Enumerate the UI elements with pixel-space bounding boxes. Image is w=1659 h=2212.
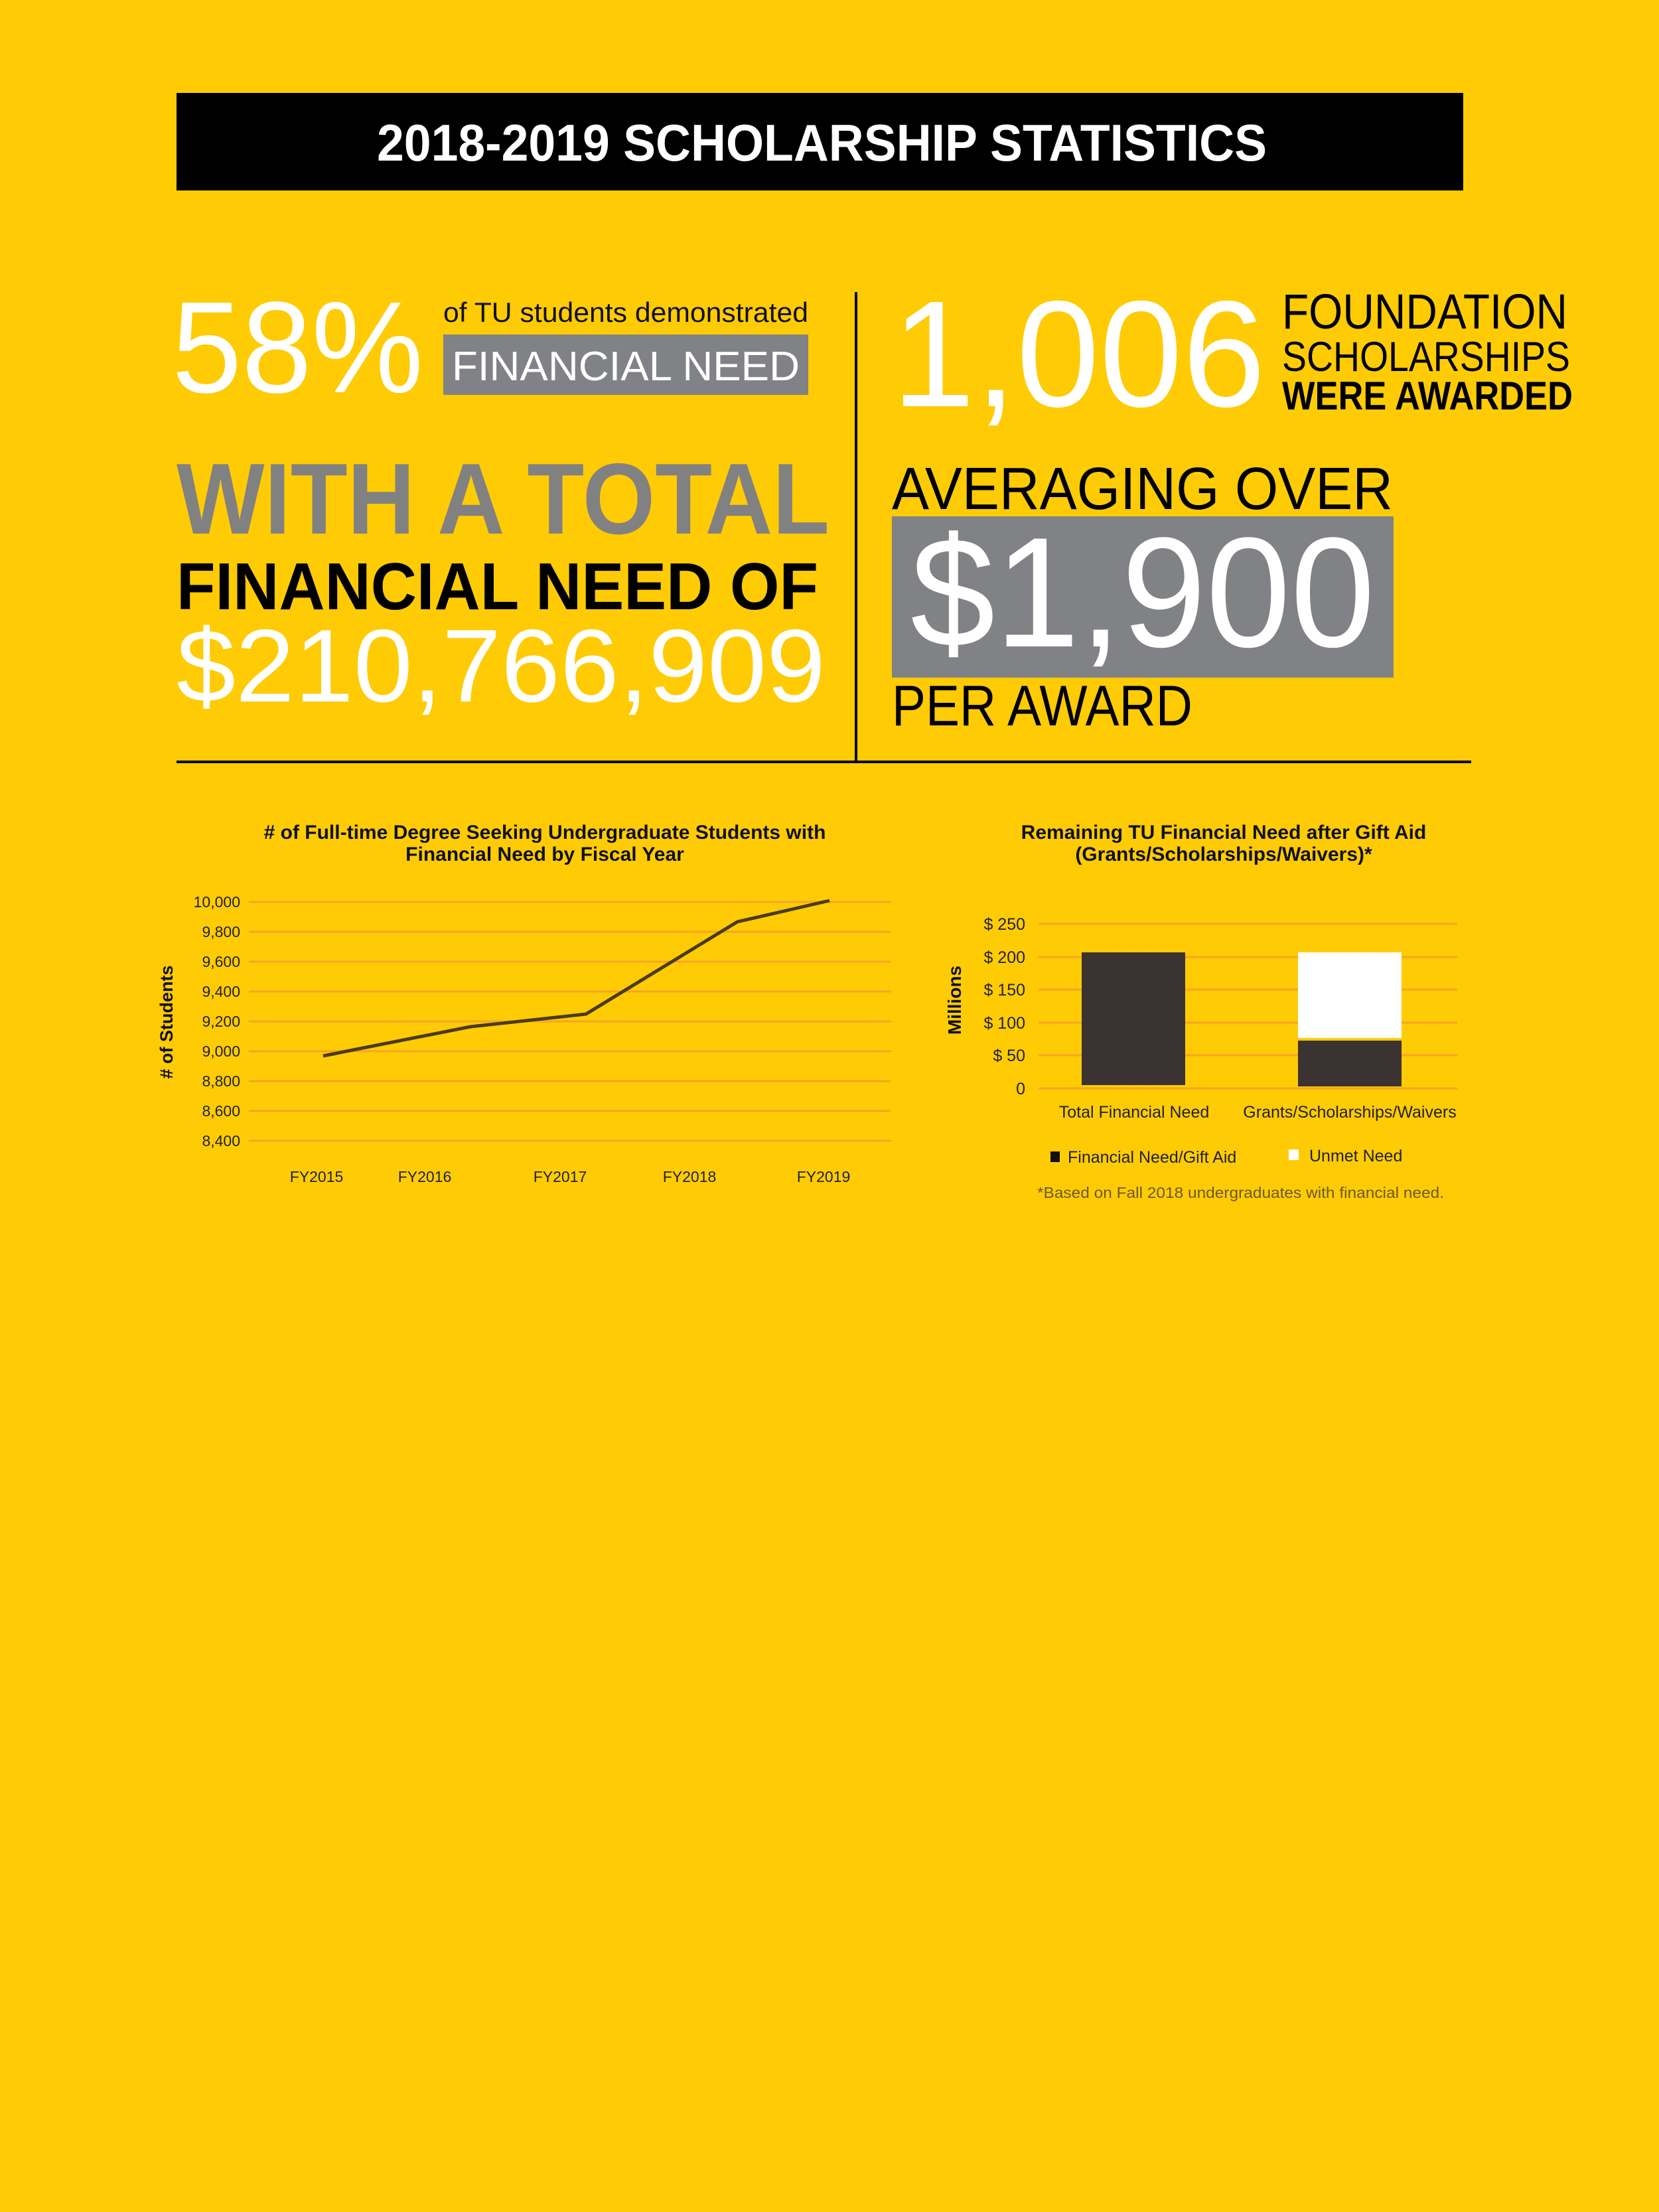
bar chart: remaining need: $ 100	[983, 1014, 1025, 1033]
stat: 58% financial need: 58%	[172, 275, 423, 420]
stat: average award	[892, 456, 1394, 738]
line chart: students with financial need	[157, 822, 891, 1185]
bar chart: remaining need: Financial Need/Gift Aid	[1068, 1148, 1236, 1167]
bar chart: remaining need: (Grants/Scholarships/Waivers)*	[1075, 844, 1372, 865]
bar chart: remaining need: Grants/Scholarships/Waivers	[1243, 1103, 1457, 1122]
stat: 1,006 scholarships: SCHOLARSHIPS	[1282, 334, 1570, 380]
stat: average award: PER AWARD	[892, 674, 1192, 738]
bar chart: remaining need: Unmet Need	[1309, 1147, 1402, 1165]
line chart: students with financial need: FY2018	[663, 1168, 716, 1185]
stat: average award: AVERAGING OVER	[892, 456, 1393, 522]
bar chart: remaining need: $ 50	[993, 1047, 1025, 1065]
stat: 1,006 scholarships: FOUNDATION	[1282, 284, 1567, 339]
stat: 58% financial need: of TU students demonstrated	[443, 297, 808, 328]
line chart: students with financial need: 9,000	[202, 1043, 240, 1060]
bar chart: remaining need: Remaining TU Financial Need after Gift Aid	[1021, 822, 1426, 844]
bar chart: remaining need: $ 150	[983, 981, 1025, 999]
stat: average award: $1,900	[910, 505, 1375, 680]
stat: 58% financial need: FINANCIAL NEED	[452, 344, 800, 390]
stat: total financial need: $210,766,909	[177, 609, 826, 724]
stat: total financial need: FINANCIAL NEED OF	[177, 550, 818, 624]
bar chart: remaining need: Millions	[944, 966, 965, 1035]
line chart: students with financial need: 8,600	[202, 1102, 240, 1120]
line chart: students with financial need: 9,200	[202, 1013, 240, 1030]
line chart: students with financial need: 9,600	[202, 953, 240, 970]
line chart: students with financial need: 9,400	[202, 983, 240, 1000]
bar chart: remaining need: $ 250	[983, 915, 1025, 934]
title bar	[177, 93, 1463, 190]
stat: 1,006 scholarships: WERE AWARDED	[1282, 374, 1573, 418]
line chart: students with financial need: # of Full-time Degree Seeking Undergraduate Students with	[264, 822, 826, 844]
line chart: students with financial need: Financial Need by Fiscal Year	[405, 844, 684, 865]
bar chart: remaining need: *Based on Fall 2018 undergraduates with financial need.	[1037, 1184, 1444, 1201]
line chart: students with financial need: FY2019	[797, 1168, 850, 1185]
line chart: students with financial need: 8,800	[202, 1072, 240, 1090]
bar chart: remaining need: 0	[1016, 1080, 1025, 1098]
bar chart: remaining need	[944, 822, 1457, 1201]
stat: 58% financial need	[172, 275, 808, 420]
stat: 1,006 scholarships: 1,006	[892, 270, 1265, 439]
bar chart: remaining need: Total Financial Need	[1059, 1103, 1209, 1122]
line chart: students with financial need: 8,400	[202, 1132, 240, 1149]
line chart: students with financial need: 9,800	[202, 923, 240, 940]
stat: total financial need: WITH A TOTAL	[177, 443, 830, 555]
bar chart: remaining need: $ 200	[983, 948, 1025, 967]
line chart: students with financial need: FY2017	[534, 1168, 587, 1185]
line chart: students with financial need: 10,000	[194, 893, 240, 911]
line chart: students with financial need: # of Students	[157, 965, 177, 1079]
line chart: students with financial need: FY2015	[290, 1168, 343, 1185]
stat: 1,006 scholarships	[892, 270, 1573, 439]
title bar: 2018-2019 SCHOLARSHIP STATISTICS	[377, 113, 1267, 172]
stat: total financial need	[177, 443, 830, 724]
line chart: students with financial need: FY2016	[398, 1168, 451, 1185]
